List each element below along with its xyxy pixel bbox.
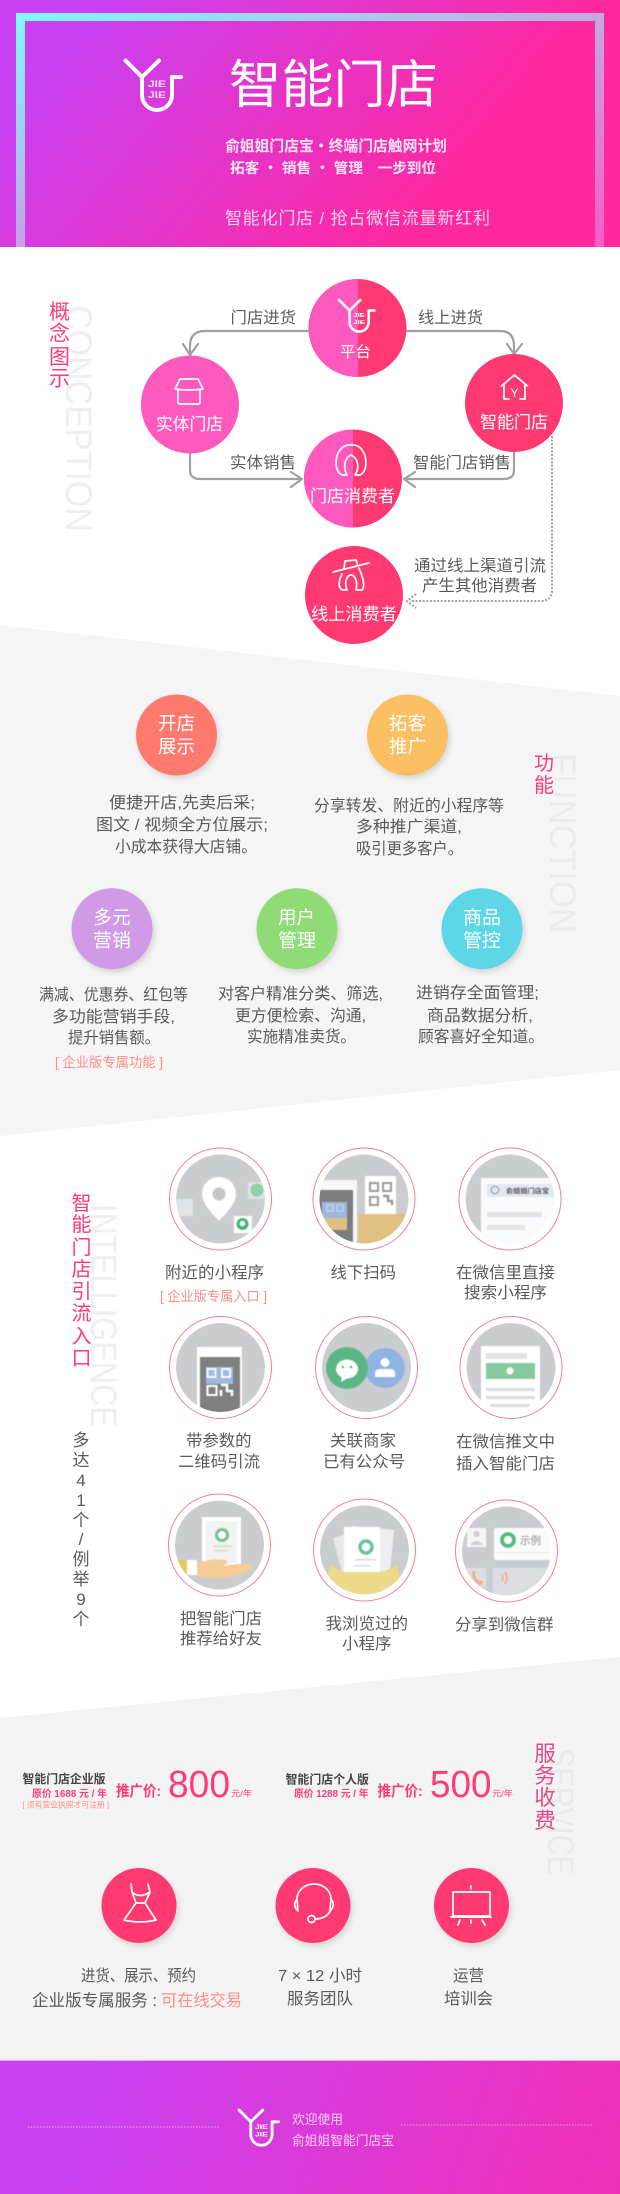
entry: WeChat search: 俞姐姐门店宝 [506,1186,550,1195]
node: online consumer [305,546,403,644]
subheading: count: 多 [72,1431,90,1450]
arrow: smart store to consumer [404,452,514,487]
arrow: physical store to consumer [190,453,302,487]
price: personal edition [286,1764,514,1806]
icon: logo: JIE [148,79,166,89]
price: enterprise edition [22,1764,253,1810]
icon: logo small [339,300,374,332]
feature: marketing: 多功能营销手段, [52,1008,175,1026]
node: store consumer [304,429,402,528]
feature: customer expansion [314,694,504,858]
heading: service: 收 [534,1786,556,1810]
price: personal edition: 原价 1288 元 / 年 [294,1787,368,1800]
subheading: count: 4 [76,1471,86,1490]
entry: WeChat search [456,1148,561,1302]
heading: entries: 口 [72,1348,92,1370]
entry: linked official account [316,1316,418,1471]
subheading: count: 1 [76,1491,86,1510]
price: personal edition: 500 [430,1764,492,1806]
icon: footer logo: JIE [255,2132,268,2139]
entry: linked official account: 已有公众号 [323,1453,405,1471]
price: enterprise edition: [ 须有营业执照才可注册 ] [22,1800,109,1810]
heading: concept: 念 [49,322,70,346]
panel: concept diagram [49,279,563,644]
subheading: count: 举 [72,1570,90,1589]
feature: customer expansion: 多种推广渠道, [356,818,462,836]
heading: entries: 智 [72,1192,92,1215]
flow label: 产生其他消费者 [422,577,537,595]
service: support team [276,1868,362,2008]
panel: service fee [22,1742,581,2010]
feature: user management: 更方便检索、沟通, [235,1007,366,1025]
arrow: platform to smart store [406,331,522,354]
service: goods display [32,1868,242,2010]
entry: nearby mini program: 附近的小程序 [165,1264,264,1282]
arrow: dotted smart store to online consumer [407,436,552,608]
service: support team: 7 × 12 小时 [278,1967,362,1985]
entry: browsed mini programs [314,1499,416,1653]
title: 智能门店 [229,57,438,115]
heading: function: 功 [534,752,554,775]
heading: concept: 图 [49,346,70,369]
heading: entries: 入 [72,1326,92,1348]
entry: share to WeChat group: 分享到微信群 [455,1616,554,1634]
feature: store display: 便捷开店,先卖后采; [109,794,255,812]
decorative word INTELLIGENCE: INTELLIGENCE [83,1204,124,1427]
flow label: 实体销售 [230,454,296,472]
feature: marketing: 多元 [94,907,130,928]
service: training: 培训会 [444,1990,493,2008]
node: physical store [141,356,239,454]
icon: logo small: JIE [353,313,365,319]
service: goods display: 可在线交易 [161,1991,242,2010]
feature: store display: 开店 [158,713,195,734]
price: enterprise edition: 原价 1688 元 / 年 [32,1787,107,1800]
flow label: 通过线上渠道引流 [414,557,546,575]
icon: logo: JIE [148,90,166,100]
feature: marketing: 满减、优惠券、红包等 [39,986,188,1004]
heading: service: 服 [534,1742,556,1766]
node: platform: 平台 [340,343,371,361]
heading: entries: 能 [72,1213,92,1236]
heading: entries: 店 [72,1258,92,1281]
feature: marketing [39,888,188,1070]
flow label: 线上进货 [418,309,483,327]
feature: customer expansion: 分享转发、附近的小程序等 [314,797,504,815]
entry: parameter QR code: 带参数的 [186,1432,252,1450]
entry: insert in article: 插入智能门店 [456,1455,555,1473]
feature: goods control [416,888,544,1046]
panel: traffic entries [72,1148,562,1653]
entry: linked official account: 关联商家 [330,1432,396,1450]
flow label: 智能门店销售 [413,454,511,472]
entry: WeChat search: 搜索小程序 [464,1284,547,1302]
entry: parameter QR code: 二维码引流 [178,1453,260,1471]
node: online consumer: 线上消费者 [311,605,397,624]
heading: function: 能 [534,774,554,797]
feature: goods control: 商品数据分析, [427,1007,533,1025]
price: personal edition: 智能门店个人版 [286,1772,369,1786]
footer text: 俞姐姐智能门店宝 [292,2133,394,2148]
subtitle line 1: 俞姐姐门店宝・终端门店触网计划 [225,137,447,155]
service: training [434,1868,509,2008]
entry: insert in article [456,1316,562,1473]
subheading: count: 个 [72,1511,90,1530]
node: physical store: 实体门店 [156,415,223,434]
panel: functions [39,694,583,1070]
node: store consumer: 门店消费者 [310,487,395,506]
decorative word FUNCTION: FUNCTION [542,753,583,933]
price: personal edition: 推广价: [378,1782,422,1800]
feature: store display: 图文 / 视频全方位展示; [96,816,268,834]
heading: service: 费 [534,1809,556,1833]
entry: offline scan [313,1148,418,1282]
entry: recommend to friends: 推荐给好友 [180,1630,262,1648]
feature: goods control: 顾客喜好全知道。 [418,1028,544,1046]
feature: user management: 对客户精准分类、筛选, [218,984,383,1003]
heading: service: 务 [534,1764,556,1788]
icon: footer logo: JIE [255,2124,268,2131]
price: enterprise edition: 推广价: [116,1782,161,1800]
panel: header banner [0,0,620,247]
service: training: 运营 [453,1967,484,1985]
feature: marketing: [ 企业版专属功能 ] [55,1054,163,1070]
feature: customer expansion: 拓客 [389,713,426,734]
feature: user management: 实施精准卖货。 [247,1028,356,1046]
feature: customer expansion: 推广 [389,736,426,757]
entry: offline scan: 线下扫码 [330,1264,396,1282]
heading: concept: 概 [49,301,70,324]
entry: browsed mini programs: 小程序 [342,1635,392,1653]
slogan: 智能化门店 / 抢占微信流量新红利 [225,209,490,228]
footer text: 欢迎使用 [292,2112,343,2127]
subheading: count: 个 [72,1610,90,1629]
node: smart store: 智能门店 [480,413,548,432]
feature: store display: 小成本获得大店铺。 [115,838,257,856]
node: smart store: Y [510,386,519,400]
entry: insert in article: 在微信推文中 [456,1433,555,1451]
feature: goods control: 进销存全面管理; [416,984,539,1002]
icon: logo [126,60,181,110]
subtitle line 2: 拓客 ・ 销售 ・ 管理 一步到位 [230,160,436,176]
entry: share to WeChat group: 示例 [520,1534,541,1547]
feature: goods control: 管控 [463,930,501,951]
feature: store display: 展示 [158,736,195,757]
feature: user management: 管理 [278,930,316,951]
service: support team: 服务团队 [287,1990,353,2008]
heading: entries: 引 [72,1280,92,1303]
node: platform [308,279,406,377]
feature: customer expansion: 吸引更多客户。 [356,840,463,858]
arrow: platform to physical store [183,331,308,355]
subheading: count: / [79,1530,84,1549]
panel: service fee background [0,1657,620,2060]
service: goods display: 企业版专属服务 : [32,1991,157,2010]
feature: store display [96,694,268,856]
service: goods display: 进货、展示、预约 [81,1967,196,1985]
decorative word CONCEPTION: CONCEPTION [58,305,99,532]
icon: logo small: JIE [353,320,365,326]
entry: share to WeChat group [455,1500,558,1634]
subheading: count: 9 [76,1590,86,1609]
feature: user management: 用户 [278,907,315,928]
entry: WeChat search: 在微信里直接 [456,1264,555,1282]
panel: functions background [0,625,620,1136]
flow label: 门店进货 [230,309,296,327]
feature: user management [218,888,383,1046]
entry: nearby mini program: [ 企业版专属入口 ] [160,1288,267,1304]
node: smart store [465,354,563,452]
entry: parameter QR code [170,1316,272,1471]
header frame [16,13,604,247]
decorative word SERVICE: SERVICE [540,1748,581,1875]
price: enterprise edition: 800 [168,1764,230,1806]
heading: entries: 门 [72,1236,92,1259]
subheading: count: 达 [72,1451,90,1470]
heading: entries: 流 [72,1302,92,1325]
subheading: count: 例 [72,1550,90,1569]
feature: goods control: 商品 [463,907,501,928]
entry: browsed mini programs: 我浏览过的 [326,1615,408,1633]
price: personal edition: 元/年 [492,1788,514,1798]
heading: concept: 示 [49,368,70,390]
entry: recommend to friends: 把智能门店 [180,1610,262,1628]
entry: nearby mini program [160,1148,272,1304]
panel: footer [0,2060,620,2194]
feature: marketing: 提升销售额。 [68,1029,160,1047]
price: enterprise edition: 元/年 [231,1788,253,1798]
icon: footer logo [239,2110,278,2145]
feature: marketing: 营销 [93,930,131,951]
entry: recommend to friends [168,1494,270,1648]
price: enterprise edition: 智能门店企业版 [22,1771,106,1786]
